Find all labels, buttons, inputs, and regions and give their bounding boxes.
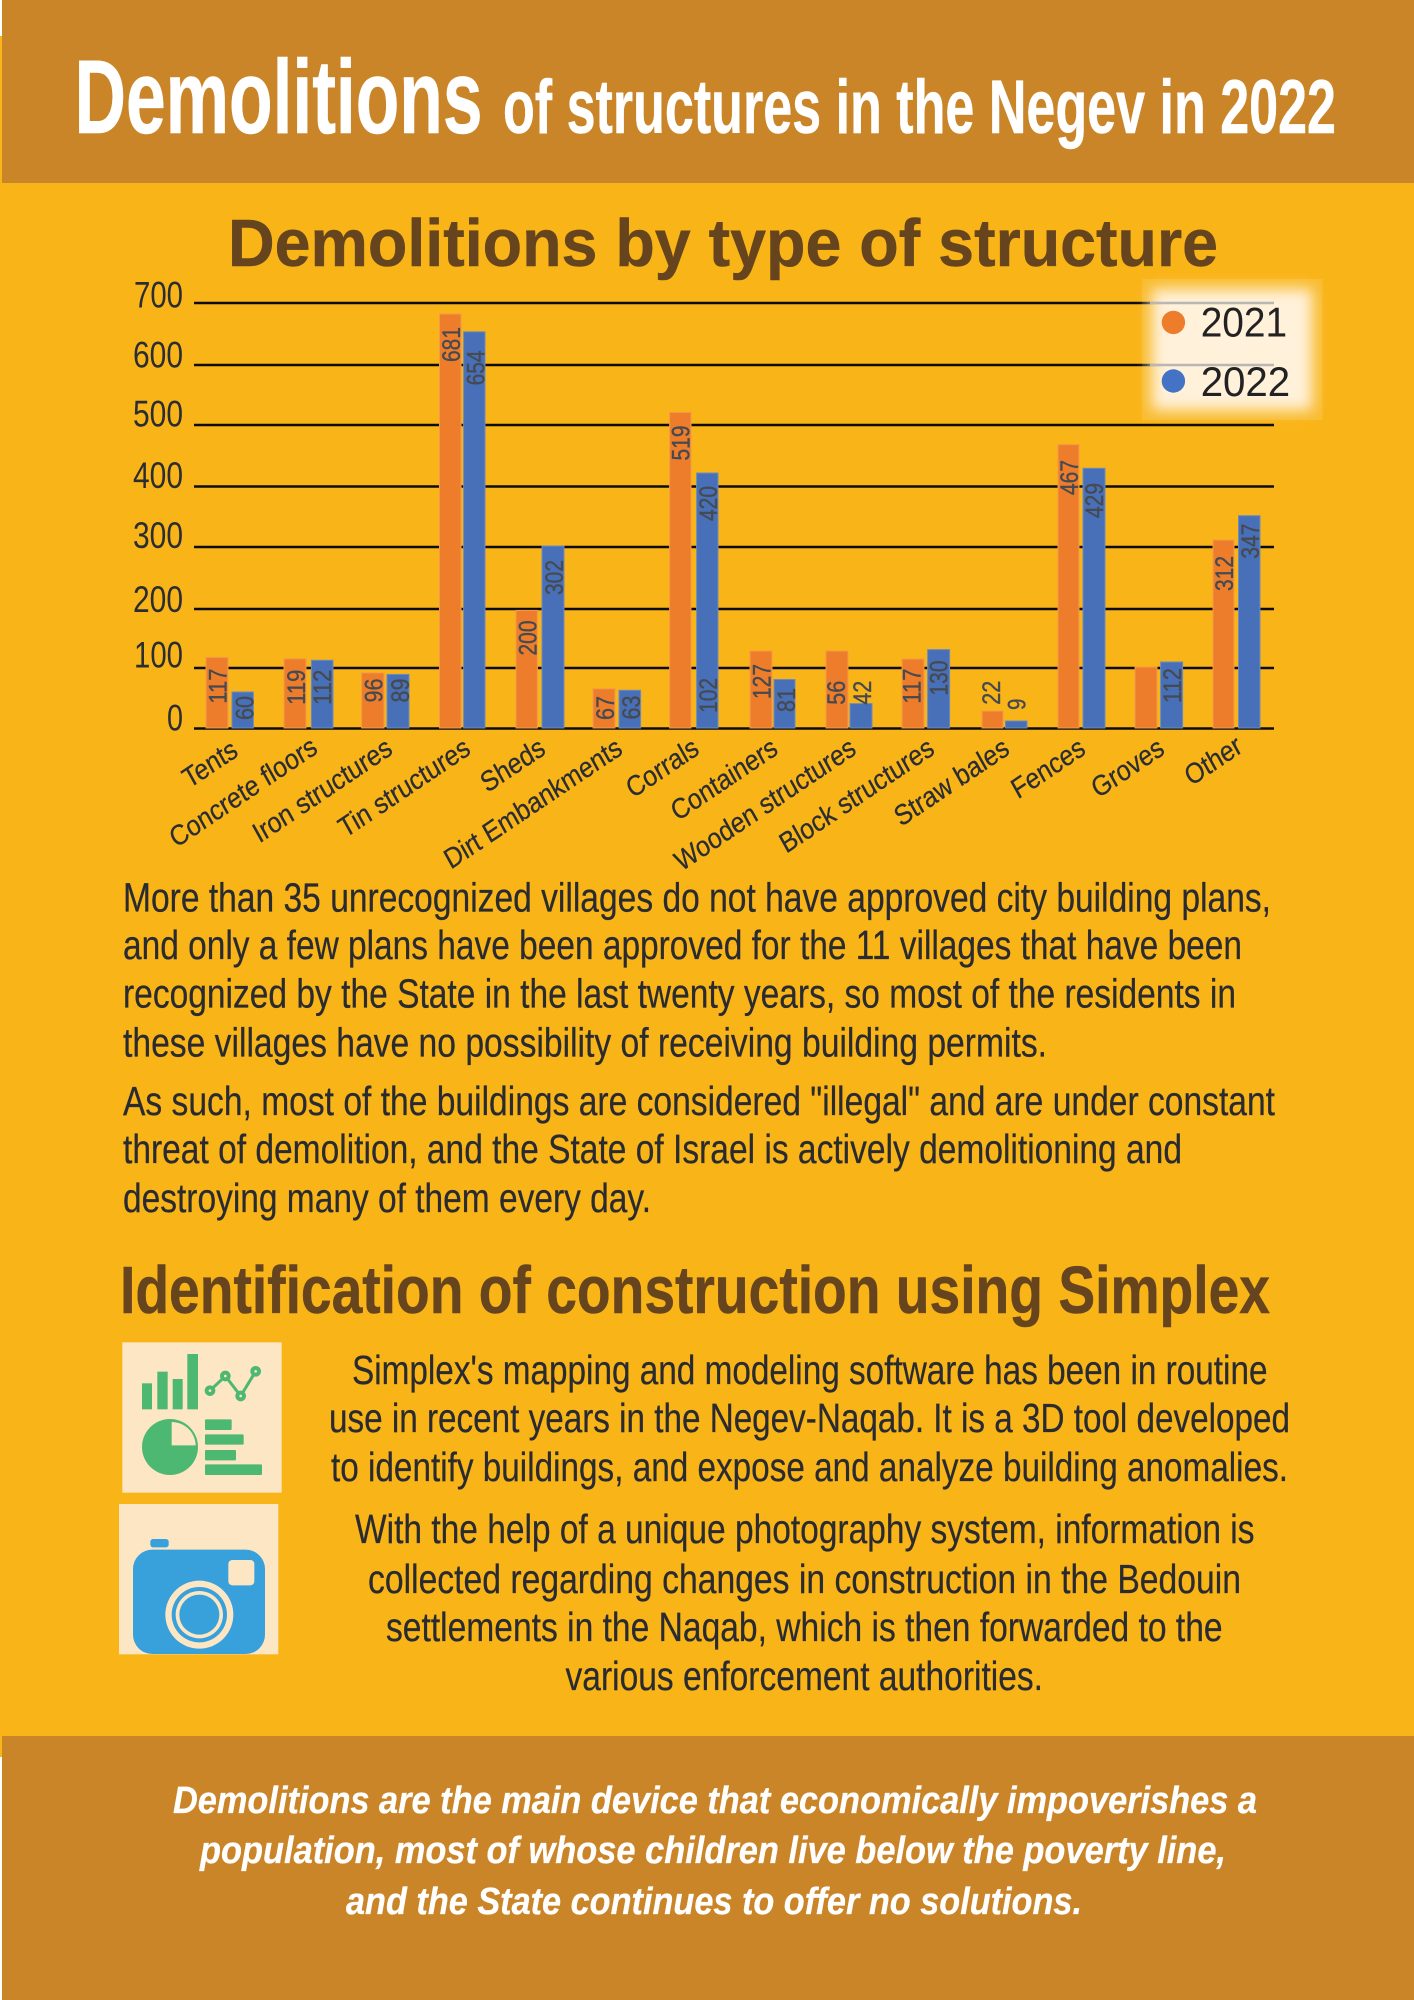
bars: Wooden structures: 56	[823, 681, 851, 705]
bars: Tin structures: 681	[438, 327, 466, 362]
bar chart: demolitions by type of structure	[133, 274, 1322, 877]
bars: Corrals: 420	[695, 486, 723, 521]
x axis category labels: Iron structures	[247, 731, 397, 849]
bars: Concrete floors: 112	[309, 670, 337, 705]
bars: Straw bales: 22	[978, 681, 1006, 705]
y axis labels: 700	[134, 274, 183, 315]
bars: Corrals	[668, 412, 723, 728]
bars: Groves	[1135, 662, 1187, 728]
bars: Concrete floors: 119	[283, 670, 311, 705]
x axis category labels: Block structures	[774, 731, 939, 859]
text block: threat of demolition: destroying many of them every day.	[123, 1175, 651, 1221]
x axis category labels: Corrals	[621, 731, 704, 804]
text block: threat of demolition	[123, 1078, 1275, 1221]
title: Demolitions	[74, 39, 482, 156]
x axis category labels	[164, 729, 1247, 877]
text block: Simplex software	[329, 1347, 1290, 1490]
bars: Tents	[204, 657, 259, 728]
footer statement: and the State continues to offer no solutions.	[346, 1881, 1082, 1923]
text block: photography system: settlements in the Naqab, which is then forwarded to the	[386, 1604, 1223, 1650]
bars: Block structures: 130	[926, 660, 954, 696]
heading: demolitions by type of structure: Demolitions by type of structure	[228, 206, 1218, 281]
bars: Corrals: 519	[668, 426, 696, 460]
bars: Groves: 112	[1159, 668, 1187, 703]
legend: 2021	[1201, 299, 1287, 346]
bars: Straw bales	[978, 681, 1031, 728]
text block: unrecognized villages	[123, 875, 1271, 1066]
bars: Containers: 127	[748, 664, 776, 699]
bars: Dirt Embankments: 67	[592, 696, 620, 720]
bars: Straw bales: 9	[1003, 698, 1031, 710]
bars: Other: 312	[1211, 556, 1239, 591]
bars: Sheds: 200	[515, 620, 543, 656]
bars: Tin structures	[438, 314, 491, 728]
legend	[1142, 279, 1322, 420]
text block: threat of demolition: threat of demolition, and the State of Israel is actively demolitioning and	[123, 1126, 1182, 1172]
bars: Containers	[748, 651, 801, 728]
x axis category labels: Groves	[1086, 731, 1169, 804]
bars: Fences: 429	[1081, 483, 1109, 518]
x axis category labels: Tents	[177, 733, 243, 794]
bars: Dirt Embankments	[592, 689, 646, 728]
x axis category labels: Containers	[665, 731, 782, 827]
bars: Fences	[1056, 445, 1109, 728]
x axis category labels: Dirt Embankments	[439, 731, 627, 875]
x axis category labels: Sheds	[475, 731, 550, 799]
bars: Sheds: 302	[541, 560, 569, 595]
bars: Other: 347	[1237, 524, 1265, 559]
bars: Iron structures: 89	[387, 678, 415, 702]
x axis category labels: Other	[1179, 729, 1247, 792]
panel: header band	[2, 0, 1414, 183]
icon: charts	[122, 1342, 282, 1493]
y axis labels: 100	[134, 634, 183, 675]
bars: Corrals: 102	[695, 678, 723, 713]
bars: Tents: 60	[231, 696, 259, 720]
y axis labels	[133, 274, 183, 739]
bars: Concrete floors	[283, 659, 337, 728]
y axis labels: 0	[167, 698, 183, 739]
footer statement: Demolitions are the main device that economically impoverishes a	[173, 1780, 1257, 1822]
bars: Iron structures: 96	[361, 678, 389, 702]
y axis labels: 600	[133, 334, 183, 375]
bars: Fences: 467	[1056, 460, 1084, 495]
panel: footer band	[2, 1736, 1414, 2000]
bars: Other	[1211, 516, 1265, 728]
legend: 2022	[1201, 358, 1290, 405]
icon: camera	[119, 1504, 278, 1654]
footer statement: population, most of whose children live below the poverty line,	[199, 1830, 1226, 1872]
bars: Containers: 81	[773, 688, 801, 712]
text block: unrecognized villages: these villages have no possibility of receiving building permits.	[123, 1020, 1047, 1066]
bars: Block structures	[899, 650, 954, 728]
y axis labels: 400	[133, 455, 183, 496]
bars: Wooden structures: 42	[849, 681, 877, 705]
bars: Iron structures	[361, 673, 415, 728]
bars: Sheds	[515, 546, 569, 728]
text block: photography system: collected regarding changes in construction in the Bedouin	[368, 1556, 1241, 1602]
bars: Dirt Embankments: 63	[618, 696, 646, 720]
x axis category labels: Tin structures	[333, 731, 475, 844]
title	[74, 39, 1336, 156]
bars: Block structures: 117	[899, 669, 927, 704]
x axis category labels: Wooden structures	[669, 731, 861, 877]
bars: Tents: 117	[204, 669, 232, 704]
y axis labels: 500	[133, 394, 183, 435]
y axis labels: 300	[133, 515, 183, 556]
text block: photography system	[355, 1506, 1254, 1699]
y axis labels: 200	[133, 579, 183, 620]
bars: Wooden structures	[823, 651, 877, 728]
x axis category labels: Fences	[1006, 731, 1090, 805]
x axis category labels: Straw bales	[889, 731, 1014, 833]
x axis category labels: Concrete floors	[164, 730, 322, 854]
bars: Tin structures: 654	[463, 350, 491, 385]
footer statement	[173, 1780, 1257, 1923]
text block: photography system: various enforcement authorities.	[566, 1653, 1043, 1699]
